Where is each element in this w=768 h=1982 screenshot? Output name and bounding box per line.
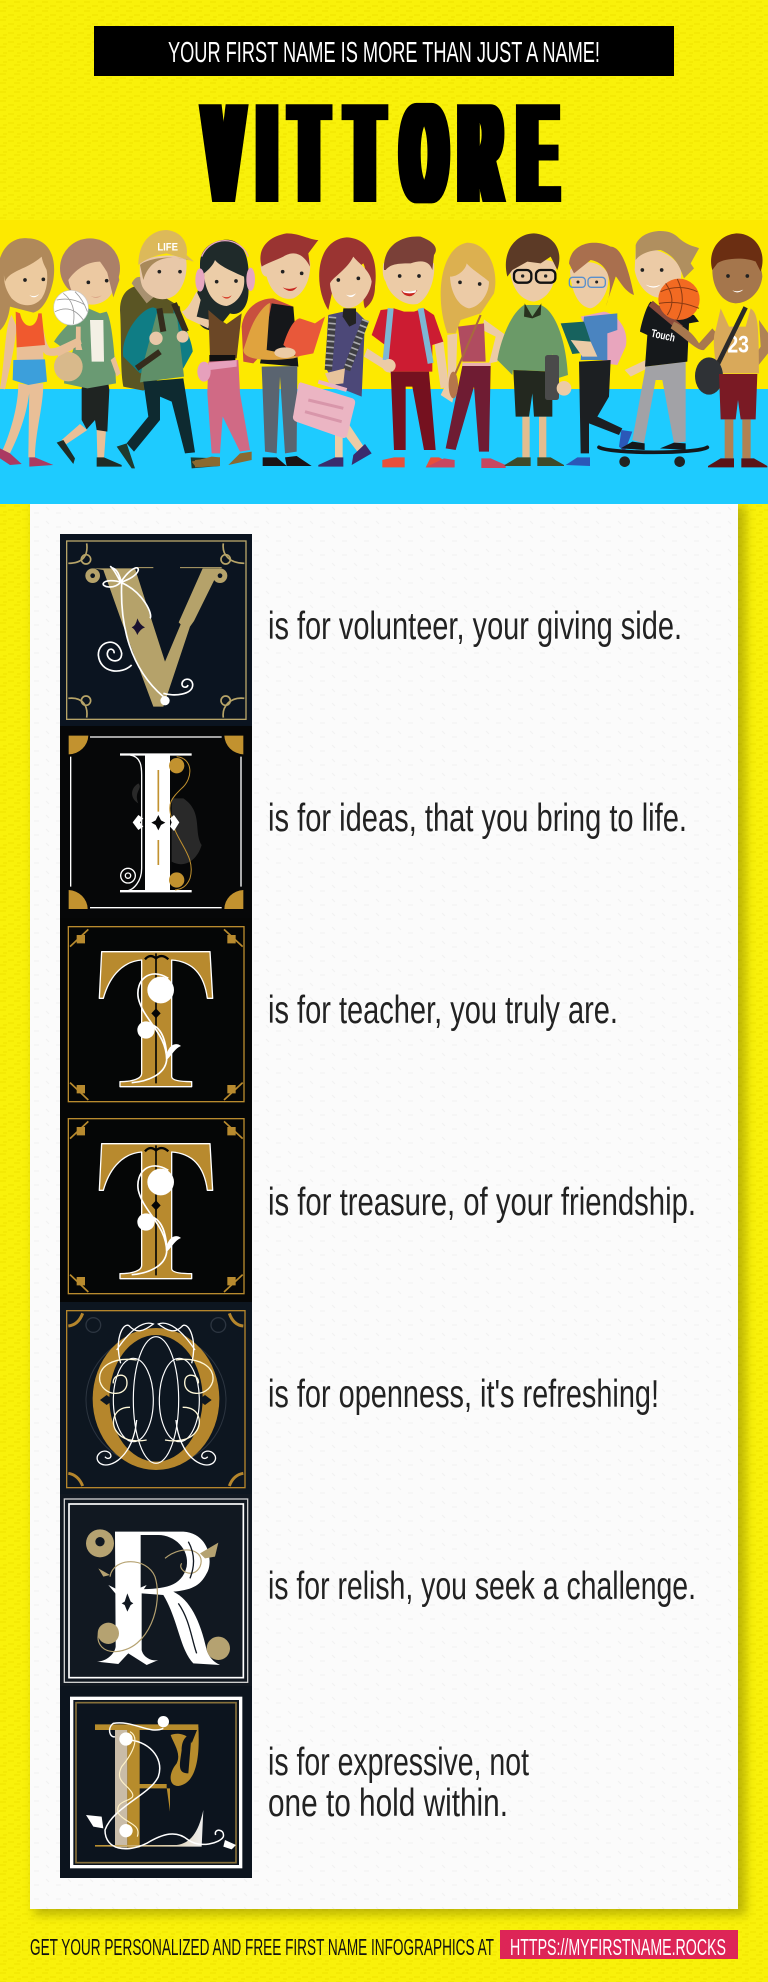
illustration band (0, 220, 768, 504)
person: red hair with book (242, 233, 325, 466)
person: purple dress with pink bag (293, 237, 376, 467)
letter tile: O (60, 1302, 252, 1494)
text: E lines: is for expressive, not (268, 1741, 529, 1784)
letter tile: I (60, 726, 252, 918)
letter tile: R (60, 1494, 252, 1686)
text: E lines: one to hold within. (268, 1782, 508, 1825)
people left group (0, 230, 376, 468)
person: cap with backpack: LIFE (157, 242, 178, 254)
person: cap with backpack (117, 230, 220, 468)
person: curly hair and tank top: 23 (727, 332, 749, 359)
top banner (94, 26, 674, 76)
person: glasses and green sweater (497, 233, 571, 466)
white panel (30, 504, 738, 1909)
person: blonde (426, 243, 506, 468)
letter tile: E (60, 1686, 252, 1878)
text: T line: is for teacher, you truly are. (268, 989, 618, 1032)
person: curly hair and tank top (695, 233, 768, 467)
text: E lines (268, 1741, 529, 1825)
letter tile: T second (60, 1110, 252, 1302)
person: skateboarder with basketball: Touch (650, 328, 676, 345)
person: red tee (364, 237, 454, 467)
person: skateboarder with basketball (599, 231, 718, 467)
letter tile: T (60, 918, 252, 1110)
person: headphones girl (182, 240, 255, 466)
letter tile: V (60, 534, 252, 726)
person: green jacket with volleyball (54, 238, 122, 467)
people right group (364, 231, 768, 468)
person: ponytail with tablet (561, 243, 634, 466)
person: orange top (0, 238, 82, 467)
title: VITTORE (206, 74, 556, 232)
